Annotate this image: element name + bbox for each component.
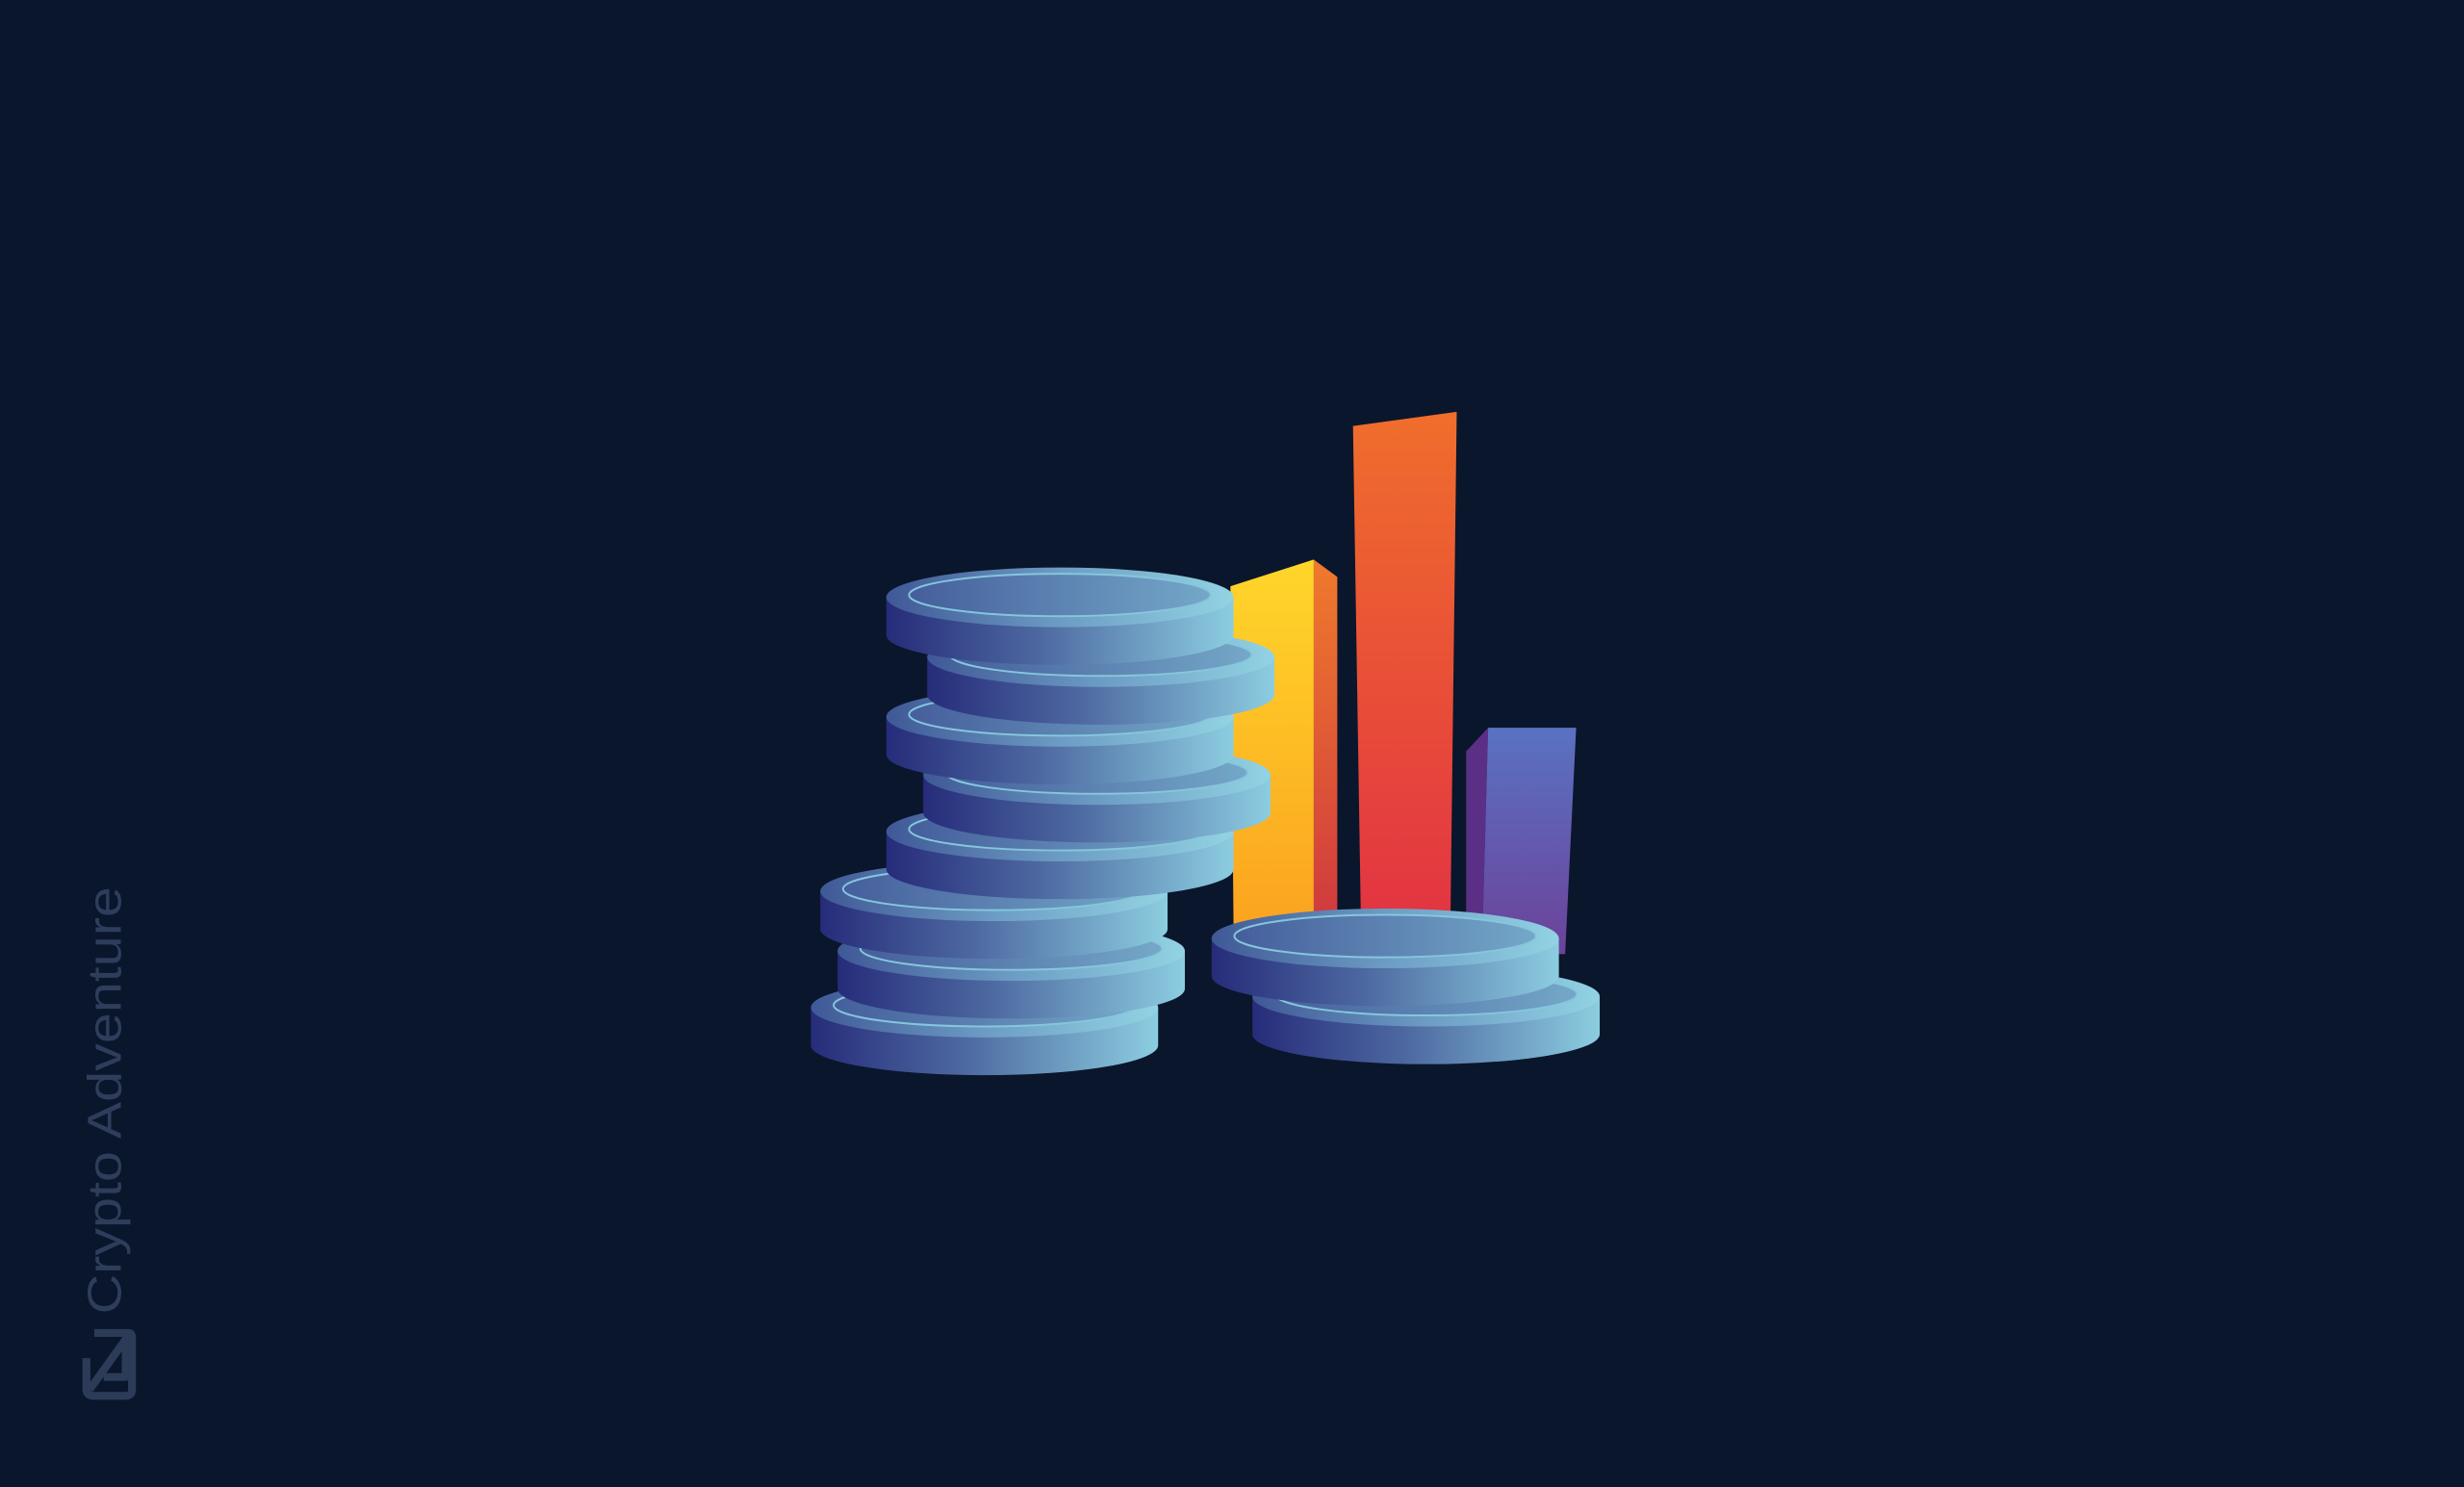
bar: orange: [1353, 412, 1456, 919]
bar: yellow: [1230, 559, 1337, 931]
bar: purple: [1466, 728, 1577, 954]
coin stack: left: [810, 568, 1274, 1075]
coin stack: right: [1212, 909, 1600, 1064]
watermark text: Crypto Adventure: [80, 886, 132, 1314]
bar chart: [1230, 412, 1577, 954]
icon: crypto adventure mark: [87, 1333, 132, 1396]
watermark logo: [80, 886, 132, 1396]
